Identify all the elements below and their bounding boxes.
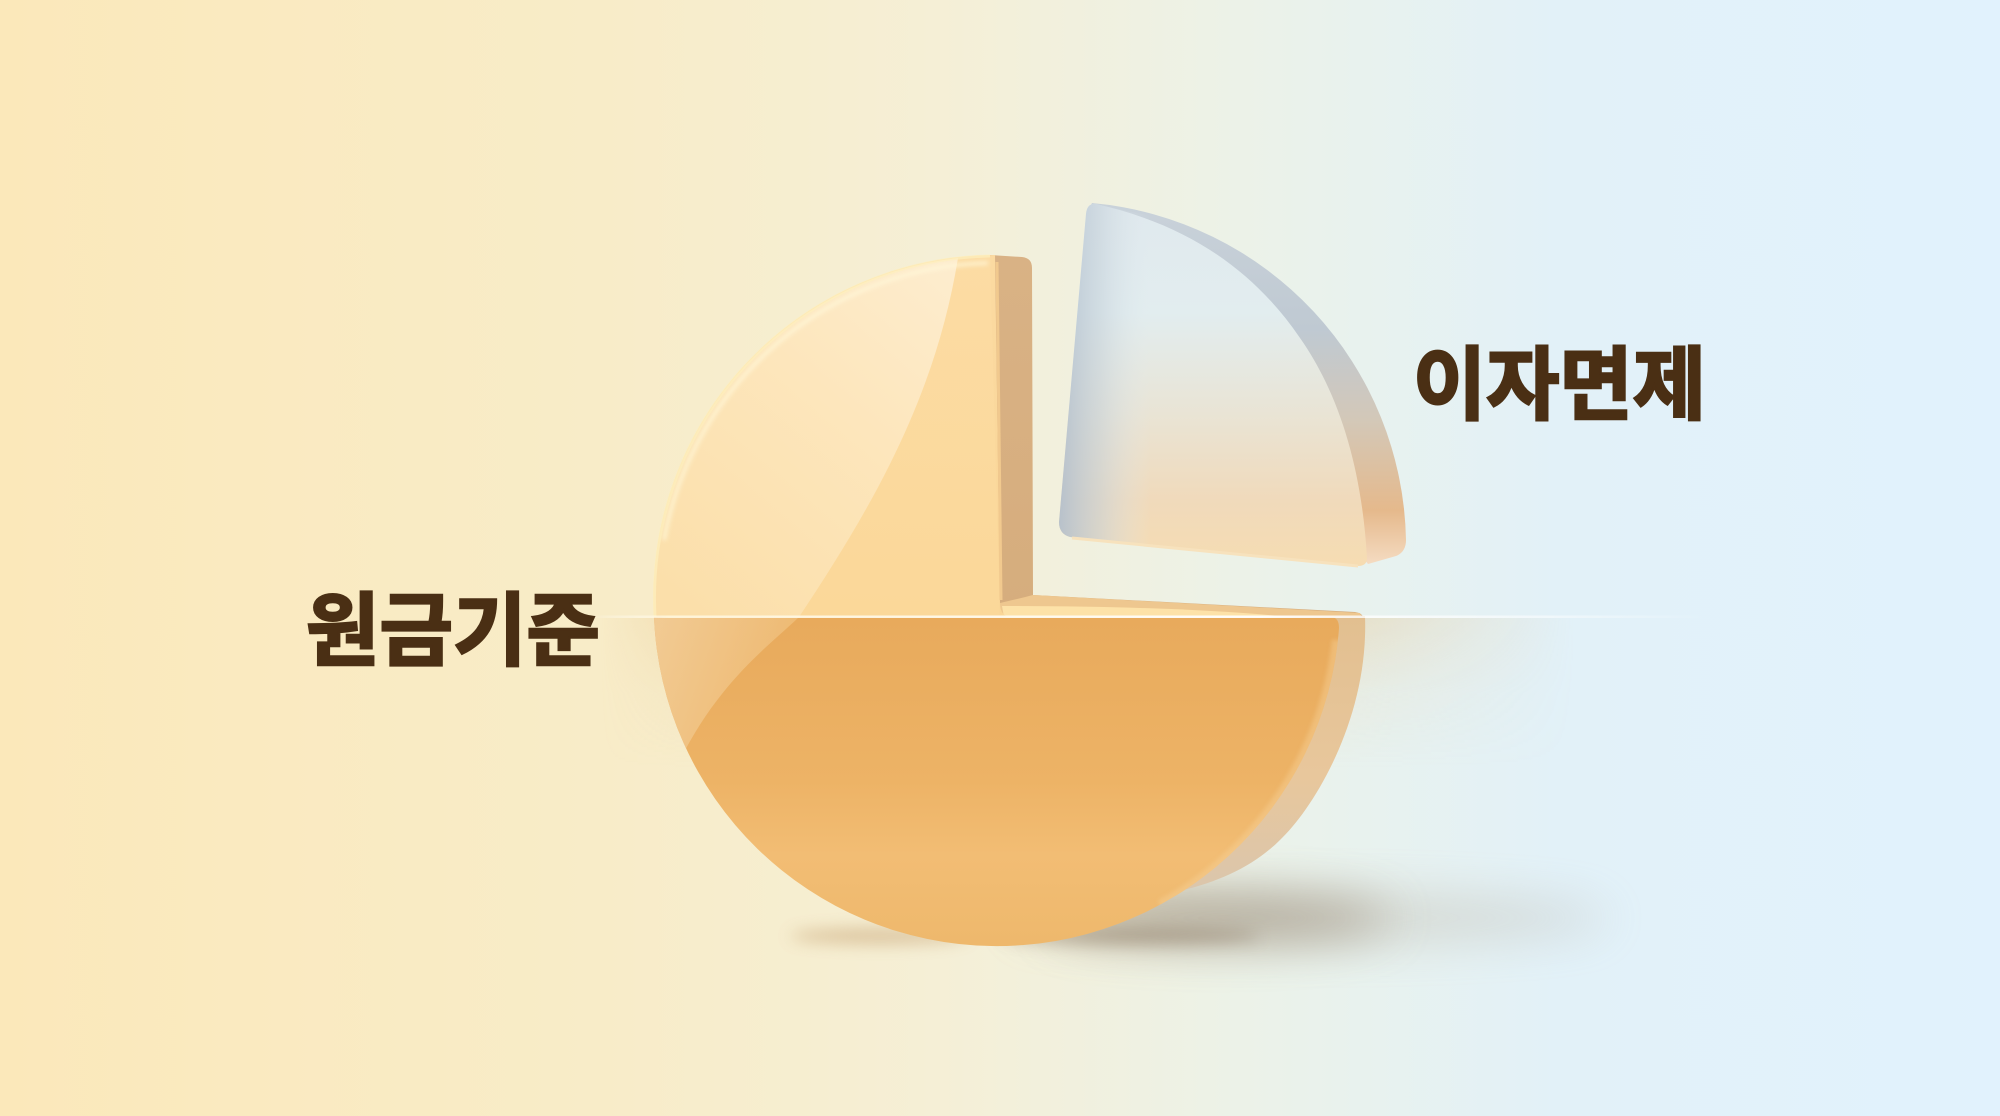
label: 이자면제: 이자면제 [1413, 321, 1706, 437]
upper slice rim light [664, 263, 988, 540]
horizon glow band [630, 618, 1529, 713]
lower slice side wall [1000, 616, 1365, 893]
grey slice front face [1059, 204, 1367, 566]
lower slice glossy highlight [654, 617, 798, 748]
lower slice right rim [1160, 640, 1337, 905]
pie slice: principal (원금기준) [640, 255, 1365, 946]
floor shadow [790, 896, 1610, 944]
horizon line [590, 616, 1710, 618]
upper slice front face [653, 255, 1012, 617]
grey slice side wall [1086, 203, 1406, 564]
upper slice glossy highlight [654, 258, 958, 617]
upper slice side wall [990, 255, 1364, 620]
pie slice: interest exemption (이자면제) [1059, 203, 1406, 566]
grey slice bottom edge light [1072, 538, 1358, 566]
label: 원금기준: 원금기준 [306, 567, 600, 683]
grey slice blue edge shading [1059, 204, 1150, 545]
top face of lower ledge [1000, 595, 1362, 618]
lower slice front face [654, 617, 1339, 946]
